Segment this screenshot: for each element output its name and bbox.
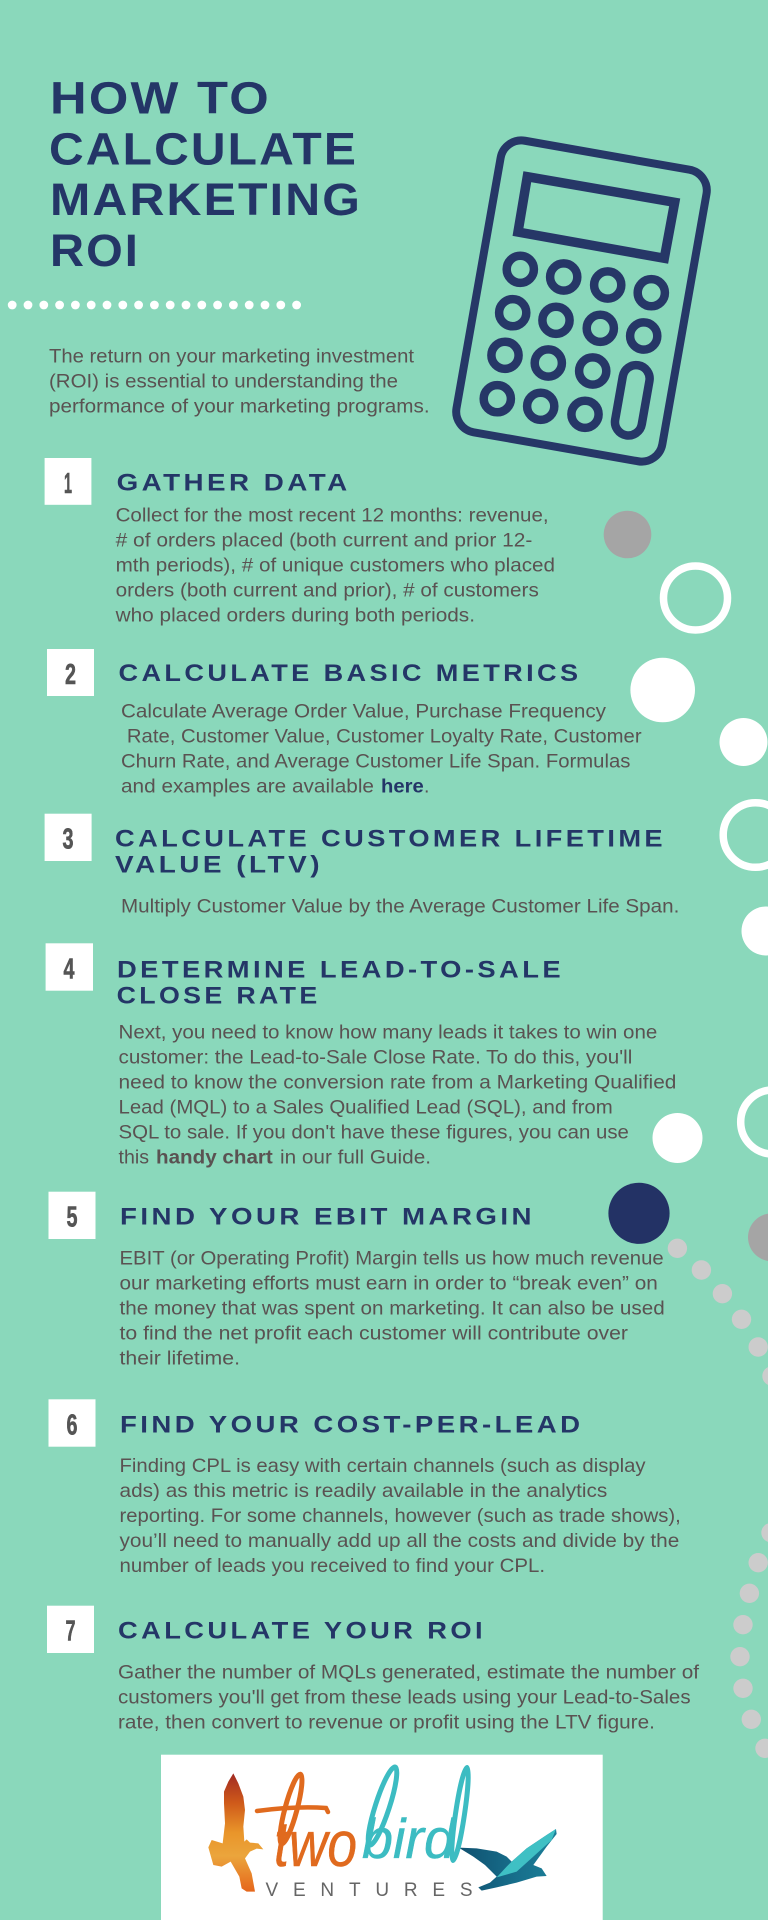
title — [49, 72, 362, 276]
step 2: calculate basic metrics: CALCULATE BASIC METRICS — [118, 660, 582, 687]
decorative circles on right side — [604, 511, 768, 1758]
step 4: lead-to-sale close rate: this — [118, 1146, 149, 1168]
step 1: gather data: orders (both current and prior), # of customers — [116, 580, 539, 602]
step 6: cost-per-lead: you’ll need to manually add up all the costs and divide by the — [120, 1530, 679, 1552]
step 4: lead-to-sale close rate — [46, 943, 676, 1168]
step 2: calculate basic metrics: . — [424, 775, 429, 797]
step 2: calculate basic metrics — [47, 649, 642, 797]
step 5: EBIT margin: their lifetime. — [120, 1347, 240, 1369]
step 1: gather data: GATHER DATA — [117, 469, 351, 496]
step 6: cost-per-lead — [48, 1399, 681, 1577]
logo panel: two bird ventures — [161, 1755, 603, 1920]
step 5: EBIT margin — [48, 1192, 665, 1369]
step 1: gather data: 1 — [64, 468, 72, 500]
step 4: lead-to-sale close rate: SQL to sale. If you don't have these figures, you can use — [118, 1121, 629, 1143]
step 2: calculate basic metrics: Calculate Average Order Value, Purchase Frequency — [121, 700, 606, 722]
step 6: cost-per-lead: 6 — [66, 1409, 78, 1441]
step 2: calculate basic metrics: Churn Rate, and Average Customer Life Span. Formulas — [121, 750, 631, 772]
step 7: calculate your ROI: Gather the number of MQLs generated, estimate the number of — [118, 1661, 700, 1683]
step 5: EBIT margin: our marketing efforts must earn in order to “break even” on — [120, 1272, 658, 1294]
step 1: gather data: mth periods), # of unique customers who placed — [116, 555, 555, 577]
step 6: cost-per-lead: Finding CPL is easy with certain channels (such as display — [120, 1455, 646, 1477]
step 6: cost-per-lead: reporting. For some channels, however (such as trade shows), — [120, 1505, 681, 1527]
intro text: performance of your marketing programs. — [49, 396, 430, 418]
step 4: lead-to-sale close rate: CLOSE RATE — [117, 983, 321, 1010]
step 4: lead-to-sale close rate: need to know the conversion rate from a Marketing Qualified — [118, 1071, 676, 1093]
step 3: customer lifetime value: VALUE (LTV) — [115, 852, 323, 879]
step 2: calculate basic metrics: 2 — [65, 659, 76, 691]
step 5: EBIT margin: EBIT (or Operating Profit) Margin tells us how much revenue — [120, 1247, 664, 1269]
step 6: cost-per-lead: number of leads you received to find your CPL. — [120, 1555, 545, 1577]
logo wordmark: ventures: VENTURES — [266, 1880, 472, 1901]
step 3: customer lifetime value — [45, 814, 679, 918]
step 6: cost-per-lead: FIND YOUR COST-PER-LEAD — [120, 1411, 584, 1438]
step 7: calculate your ROI: rate, then convert to revenue or profit using the LTV figure. — [118, 1711, 655, 1733]
step 4: lead-to-sale close rate: DETERMINE LEAD-TO-SALE — [117, 957, 564, 984]
logo wordmark: bird: bird — [362, 1807, 457, 1870]
step 7: calculate your ROI: customers you'll get from these leads using your Lead-to-Sales — [118, 1686, 691, 1708]
step 3: customer lifetime value: 3 — [62, 824, 74, 856]
step 5: EBIT margin: FIND YOUR EBIT MARGIN — [120, 1204, 535, 1231]
step 4: lead-to-sale close rate: handy chart — [156, 1146, 273, 1168]
title: HOW TO — [50, 72, 271, 123]
intro text: (ROI) is essential to understanding the — [49, 371, 398, 393]
step 3: customer lifetime value: CALCULATE CUSTOMER LIFETIME — [115, 825, 666, 852]
step 5: EBIT margin: 5 — [66, 1202, 78, 1234]
step 7: calculate your ROI: CALCULATE YOUR ROI — [118, 1617, 486, 1644]
step 4: lead-to-sale close rate: customer: the Lead-to-Sale Close Rate. To do this, you'll — [118, 1046, 632, 1068]
step 4: lead-to-sale close rate: 4 — [64, 953, 74, 985]
step 2: calculate basic metrics: Rate, Customer Value, Customer Loyalty Rate, Customer — [127, 725, 642, 747]
step 5: EBIT margin: to find the net profit each customer will contribute over — [120, 1322, 629, 1344]
step 5: EBIT margin: the money that was spent on marketing. It can also be used — [120, 1297, 665, 1319]
step 4: lead-to-sale close rate: Lead (MQL) to a Sales Qualified Lead (SQL), and from — [118, 1096, 613, 1118]
step 3: customer lifetime value: Multiply Customer Value by the Average Customer Life Span. — [121, 896, 679, 918]
step 2: calculate basic metrics: and examples are available — [121, 775, 374, 797]
logo wordmark: bird — [362, 1765, 471, 1870]
title: CALCULATE — [49, 123, 358, 174]
step 2: calculate basic metrics: here — [381, 775, 424, 797]
step 1: gather data: Collect for the most recent 12 months: revenue, — [116, 505, 549, 527]
logo wordmark: two — [257, 1773, 357, 1880]
intro text: The return on your marketing investment — [49, 346, 415, 368]
intro text — [49, 346, 430, 418]
icon: teal bird — [459, 1829, 557, 1891]
step 4: lead-to-sale close rate: in our full Guide. — [280, 1146, 431, 1168]
dotted divider — [8, 301, 301, 309]
title: MARKETING — [50, 174, 362, 225]
step 1: gather data — [45, 458, 555, 627]
step 1: gather data: # of orders placed (both current and prior 12- — [116, 530, 532, 552]
step 1: gather data: who placed orders during both periods. — [115, 605, 475, 627]
logo wordmark: two: two — [274, 1808, 357, 1880]
icon: calculator — [453, 137, 710, 465]
step 7: calculate your ROI — [47, 1606, 700, 1733]
title: ROI — [50, 225, 140, 276]
step 4: lead-to-sale close rate: Next, you need to know how many leads it takes to win one — [118, 1021, 657, 1043]
step 7: calculate your ROI: 7 — [66, 1616, 76, 1648]
step 6: cost-per-lead: ads) as this metric is readily available in the analytics — [120, 1480, 608, 1502]
icon: orange bird — [208, 1773, 263, 1892]
